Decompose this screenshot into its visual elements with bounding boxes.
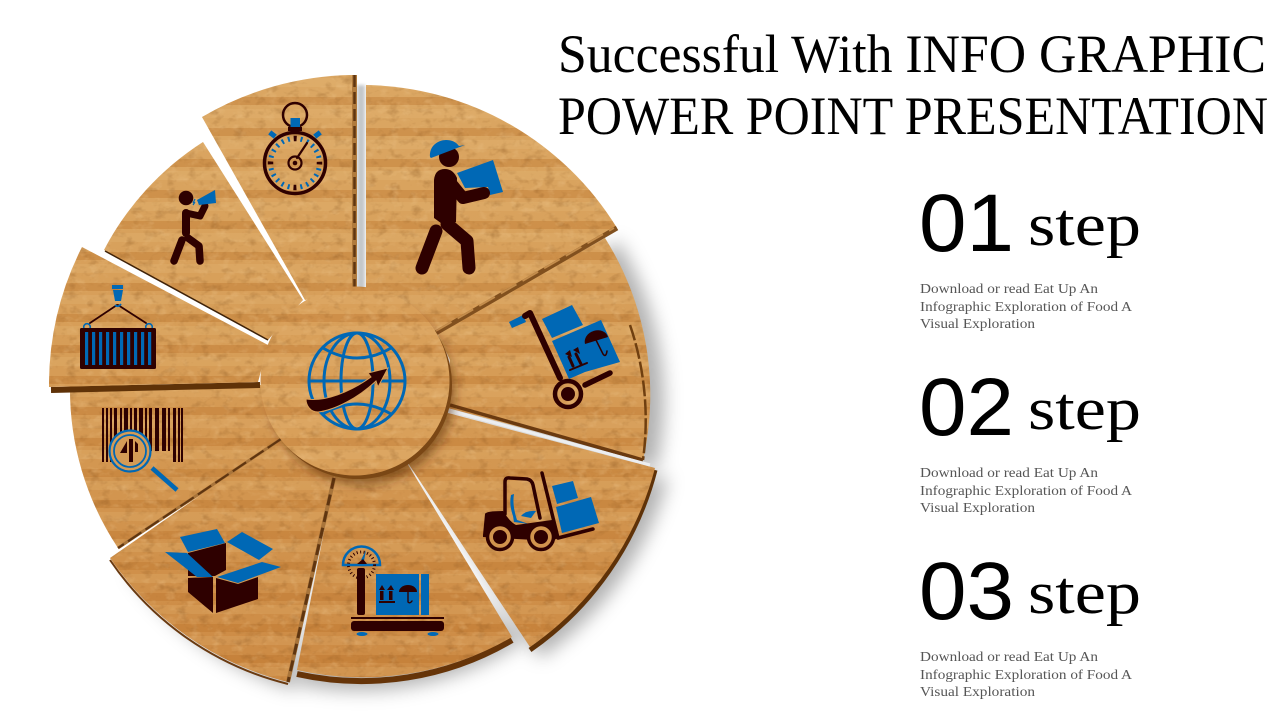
panel: worker carrying box — [366, 85, 617, 333]
step 2: Download or read Eat Up An — [920, 465, 1098, 480]
step 3 — [919, 546, 1141, 699]
panel: weighing scale — [297, 463, 512, 681]
panel: hand truck — [437, 238, 650, 460]
right corrugated rim — [630, 325, 646, 460]
gap shadow between first pieces — [357, 85, 365, 291]
icon: stopwatch — [264, 103, 326, 194]
step 1: 01 — [919, 178, 1014, 269]
icon: container on hook — [80, 285, 156, 369]
icon: worker — [422, 140, 503, 268]
step 3: 03 — [919, 546, 1014, 637]
icon: man with megaphone — [174, 190, 216, 261]
panel: forklift — [408, 413, 655, 650]
panel: open box — [110, 440, 335, 684]
icon: barcode with magnifier — [102, 408, 183, 490]
white cut: trolley and forklift — [448, 410, 650, 465]
divider: box and scale — [288, 478, 334, 682]
bottom rim — [297, 640, 512, 681]
step 3: Visual Exploration — [920, 684, 1035, 699]
title: Successful With INFO GRAPHIC — [558, 24, 1266, 84]
divider: trolley and forklift — [450, 405, 643, 460]
step 1: Infographic Exploration of Food A — [920, 299, 1132, 314]
icon: hand truck — [509, 305, 620, 407]
icon: open box — [165, 529, 281, 613]
step 1: step — [1028, 192, 1141, 258]
divider: worker and trolley — [434, 228, 617, 334]
corrugated side edge — [352, 75, 357, 290]
step 2: 02 — [919, 362, 1014, 453]
step 1 — [919, 178, 1141, 331]
panel: centre globe disc — [260, 286, 450, 476]
step 1: Download or read Eat Up An — [920, 281, 1098, 296]
step 3: step — [1028, 560, 1141, 626]
step 3: Download or read Eat Up An — [920, 649, 1098, 664]
centre disc rim — [264, 291, 452, 479]
panel: megaphone man — [104, 142, 303, 340]
dark fold edge — [105, 251, 268, 340]
icon: scale — [343, 546, 444, 636]
step 2: step — [1028, 376, 1141, 442]
step 2: Visual Exploration — [920, 500, 1035, 515]
icon: globe with arrow — [306, 333, 405, 429]
title — [558, 24, 1268, 146]
step 1: Visual Exploration — [920, 316, 1035, 331]
panel: container — [49, 247, 268, 390]
step 2: Infographic Exploration of Food A — [920, 483, 1132, 498]
panel: stopwatch — [202, 75, 354, 300]
icon: forklift — [483, 473, 599, 550]
panel: barcode search — [70, 385, 290, 548]
centre disc shadow — [269, 299, 455, 485]
wheel drop shadow — [130, 240, 668, 691]
corrugated rim — [530, 470, 655, 650]
step 3: Infographic Exploration of Food A — [920, 667, 1132, 682]
step 2 — [919, 362, 1141, 515]
divider: barcode and box — [118, 439, 281, 548]
